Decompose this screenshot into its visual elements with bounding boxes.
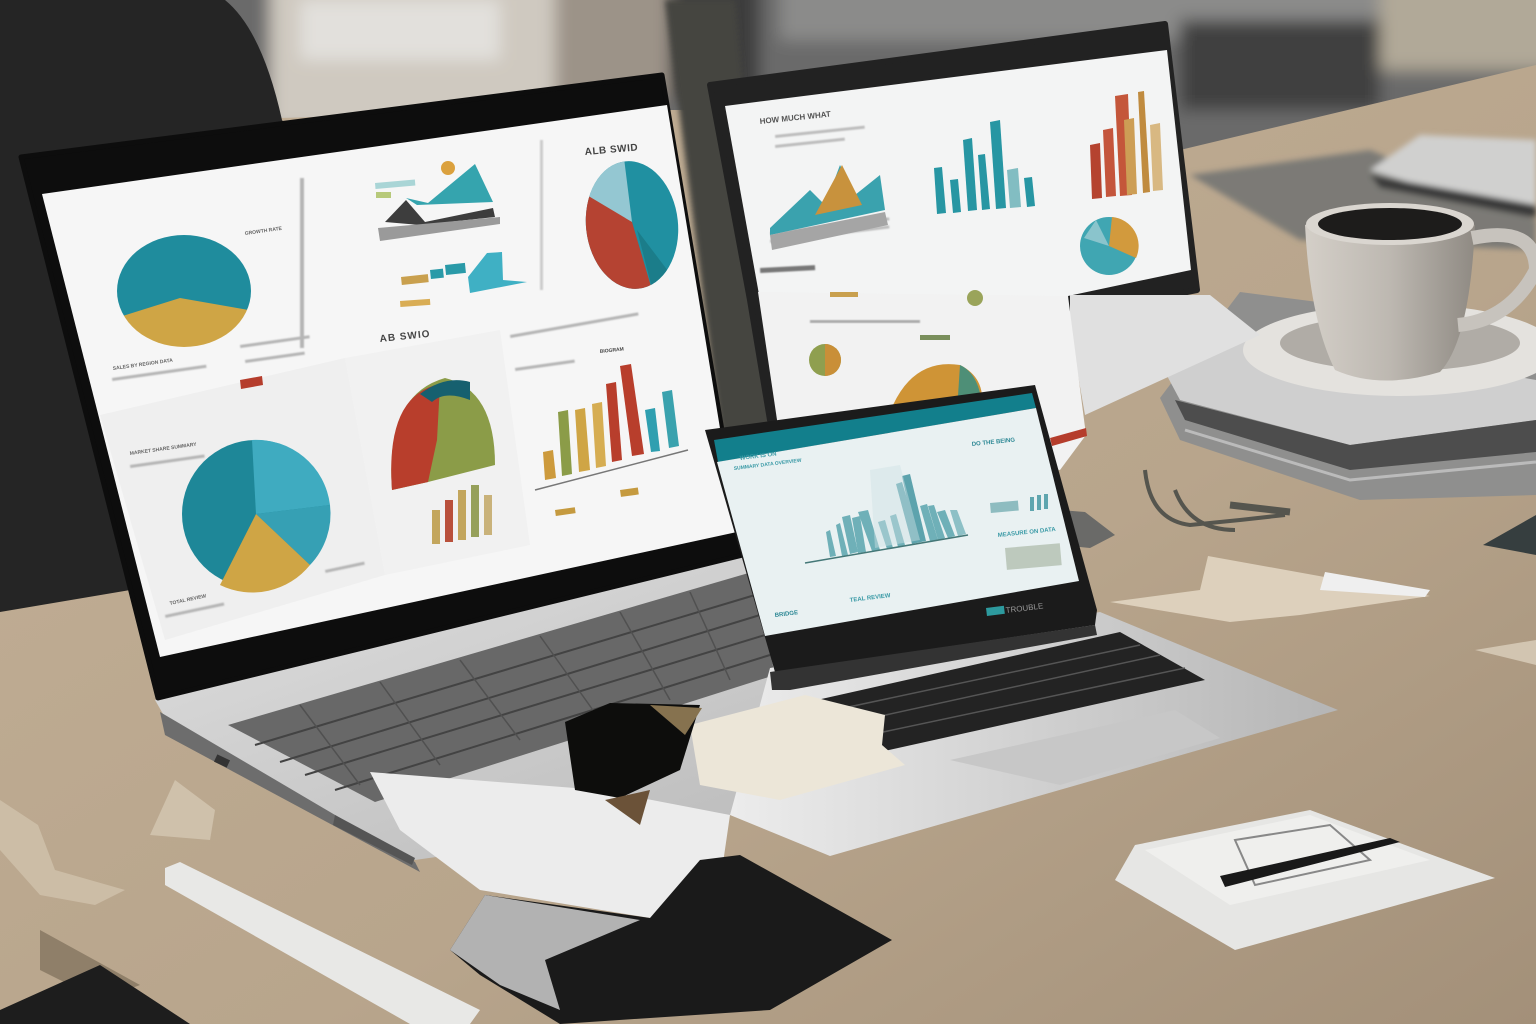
screen captions: TEAL REVIEW bbox=[850, 593, 891, 604]
small laptop screen bbox=[705, 385, 1097, 690]
small stacked bars bbox=[432, 485, 492, 544]
skyline chart bbox=[826, 474, 966, 557]
caption text: GROWTH RATE bbox=[244, 226, 283, 237]
trackpad bbox=[950, 710, 1220, 785]
hinge behind small laptop bbox=[1060, 510, 1115, 548]
screen captions: WORK IS ON bbox=[740, 452, 777, 462]
status strip: TROUBLE bbox=[1005, 601, 1044, 615]
folded tan paper bbox=[1110, 556, 1430, 622]
large laptop screen bbox=[21, 75, 743, 698]
glasses bbox=[1145, 470, 1290, 530]
status strip bbox=[986, 601, 1044, 616]
white pen bbox=[165, 862, 480, 1024]
caption text: MARKET SHARE SUMMARY bbox=[129, 442, 198, 457]
paper behind small laptop bbox=[758, 290, 1260, 470]
large laptop base bbox=[155, 552, 1000, 872]
small keyboard bbox=[808, 632, 1205, 752]
caption text: TOTAL REVIEW bbox=[169, 593, 207, 607]
screen caption lines bbox=[112, 140, 639, 618]
black folder bbox=[450, 855, 892, 1024]
paper charts bbox=[809, 290, 983, 410]
coloured bars bbox=[1090, 91, 1163, 199]
stack of magazines bbox=[1160, 292, 1536, 500]
coffee cup and saucer bbox=[1243, 203, 1536, 396]
pie small bbox=[1080, 217, 1139, 275]
small heading: BIOGRAM bbox=[600, 347, 624, 355]
desk items at top right bbox=[1190, 135, 1536, 250]
heading top right: ALB SWID bbox=[584, 142, 638, 158]
notepad with pen bbox=[1115, 810, 1495, 950]
back laptop caption lines bbox=[760, 126, 889, 273]
back laptop title: HOW MUCH WHAT bbox=[759, 110, 831, 126]
small teal shapes bbox=[400, 252, 527, 307]
mountain chart bbox=[770, 165, 888, 250]
red and teal pie bbox=[586, 161, 678, 289]
pen bbox=[1220, 838, 1400, 887]
caption text: SALES BY REGION DATA bbox=[112, 358, 174, 372]
heading middle: AB SWIO bbox=[379, 329, 430, 345]
caption text bbox=[112, 226, 283, 607]
keyboard bbox=[228, 572, 775, 802]
small laptop base bbox=[730, 612, 1338, 856]
teal bars bbox=[934, 120, 1035, 214]
gap behind laptops bbox=[665, 0, 775, 560]
pie: teal and yellow bbox=[117, 235, 251, 347]
screen captions: MEASURE ON DATA bbox=[998, 527, 1057, 539]
back laptop bbox=[710, 24, 1197, 420]
background room bbox=[0, 0, 1536, 280]
dark corner object bbox=[0, 965, 190, 1024]
torn paper scraps left bbox=[0, 780, 215, 1000]
chair bbox=[0, 0, 400, 612]
mini bars right bbox=[990, 494, 1062, 570]
bar chart bbox=[535, 364, 688, 516]
pie: lower left bbox=[182, 440, 331, 592]
screen captions bbox=[734, 437, 1057, 619]
screen captions: BRIDGE bbox=[775, 610, 798, 619]
screen captions: SUMMARY DATA OVERVIEW bbox=[734, 458, 802, 472]
screen captions: DO THE BEING bbox=[972, 437, 1016, 448]
white paper with black object and cream sheet bbox=[370, 695, 905, 925]
area chart with sun bbox=[375, 161, 500, 241]
semicircle pie bbox=[391, 378, 495, 490]
dark note right edge bbox=[1483, 515, 1536, 555]
side port bbox=[214, 754, 230, 768]
